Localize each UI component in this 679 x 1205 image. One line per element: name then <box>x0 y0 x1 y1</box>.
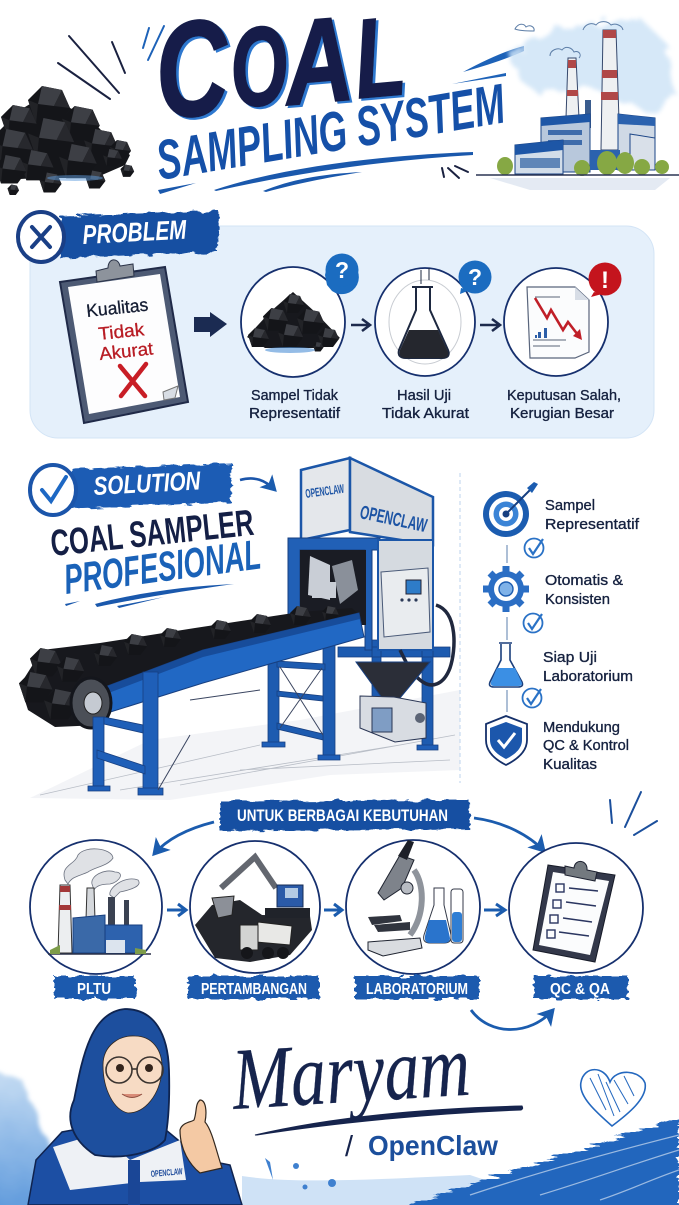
discharge funnel <box>356 662 430 698</box>
section: solution heading <box>30 463 275 608</box>
step labels <box>249 387 621 422</box>
question bubble <box>325 260 359 294</box>
question bubble <box>458 260 492 294</box>
text: sampel representatif: Representatif <box>545 516 640 533</box>
step 2: flask <box>375 260 492 376</box>
icon: coal pile <box>0 86 134 195</box>
brand: OpenClaw: / <box>345 1131 354 1163</box>
eyes and mouth <box>116 1064 153 1098</box>
heading: COAL: O <box>226 2 292 131</box>
face <box>103 1036 162 1113</box>
back legs <box>268 640 450 757</box>
step labels: Kerugian Besar <box>510 405 614 422</box>
person: mascot <box>28 1009 242 1205</box>
text: siap uji laboratorium <box>543 649 633 685</box>
step labels: Tidak Akurat <box>382 405 470 422</box>
icon: check <box>524 614 542 632</box>
step 1: coal sample: ? <box>335 257 349 283</box>
arrow <box>167 904 186 916</box>
upper hopper box <box>301 458 433 545</box>
step 3: falling report: ! <box>601 267 609 294</box>
circle: mining <box>190 841 320 973</box>
trees <box>497 151 669 176</box>
arrow right <box>474 818 544 851</box>
red cross <box>120 364 146 396</box>
text: mendukung qc <box>543 719 629 773</box>
title: COAL SAMPLING SYSTEM <box>150 0 510 194</box>
white chest panel <box>53 1133 186 1190</box>
crusher mechanism <box>300 550 366 625</box>
icon: check <box>522 688 542 708</box>
clipboard <box>60 260 188 423</box>
clipboard: Tidak <box>97 319 146 344</box>
illustration: power plant <box>476 18 679 190</box>
circle: laboratory <box>346 840 480 974</box>
buildings <box>541 114 590 172</box>
text: mendukung qc: Kualitas <box>543 756 597 773</box>
circle: pltu <box>30 840 162 974</box>
sample box <box>360 696 426 742</box>
heading: COAL <box>150 0 410 147</box>
alert bubble <box>588 262 622 296</box>
footer wash: light band <box>242 1175 560 1205</box>
title underline strokes <box>158 152 473 194</box>
step 2: flask: ? <box>468 264 482 290</box>
text: siap uji laboratorium: Laboratorium <box>543 668 633 685</box>
text: otomatis konsisten <box>545 572 623 608</box>
arrow <box>351 319 370 331</box>
panel: problem <box>18 211 654 438</box>
chimneys <box>601 30 620 150</box>
cable <box>400 605 454 685</box>
pill labels <box>54 976 628 999</box>
arrow to machine <box>240 478 275 490</box>
banner: UNTUK BERBAGAI KEBUTUHAN <box>237 806 448 825</box>
solution banner <box>30 463 232 515</box>
problem banner: PROBLEM <box>82 215 188 250</box>
ground <box>476 174 679 176</box>
clouds <box>515 22 623 58</box>
benefits list <box>483 482 640 773</box>
pill labels: LABORATORIUM <box>366 981 468 998</box>
clipboard text: Kualitas <box>85 295 149 321</box>
icon: target <box>483 482 538 537</box>
jacket <box>28 1125 242 1205</box>
heading: coal sampler: COAL SAMPLER <box>49 502 256 564</box>
solution banner: SOLUTION <box>93 465 202 501</box>
decorative burst lines <box>58 26 468 178</box>
step labels: Sampel Tidak <box>251 387 338 404</box>
pill labels: PLTU <box>77 981 111 998</box>
divider <box>459 473 461 783</box>
icon: shield <box>486 716 527 765</box>
step labels: Representatif <box>249 405 341 422</box>
arrow <box>194 312 227 337</box>
section: untuk berbagai kebutuhan <box>30 792 657 1030</box>
coal on belt <box>19 606 360 727</box>
footer wash: left <box>0 1072 62 1205</box>
problem banner <box>18 211 219 262</box>
arrow <box>484 904 505 916</box>
underline strokes <box>65 584 234 608</box>
pill labels: QC & QA <box>550 981 610 998</box>
step 1: coal sample <box>241 254 359 377</box>
illustration: coal sampler machine <box>19 458 460 800</box>
text: mendukung qc: QC & Kontrol <box>543 737 629 754</box>
curved arrow <box>471 1010 553 1030</box>
brand: OpenClaw: OpenClaw <box>368 1130 498 1161</box>
connector lines <box>506 545 508 712</box>
floor sketch <box>30 690 460 800</box>
text: mendukung qc: Mendukung <box>543 719 620 736</box>
text: sampel representatif <box>545 497 640 533</box>
label: small OPENCLAW: OPENCLAW <box>304 482 345 501</box>
jacket logo: OPENCLAW <box>150 1166 183 1179</box>
icon: gear <box>483 566 529 612</box>
sparks <box>610 792 657 835</box>
tail drum <box>71 678 111 728</box>
label: large OPENCLAW: OPENCLAW <box>358 502 429 537</box>
icon: flask <box>490 643 522 687</box>
conveyor side beam <box>97 613 364 714</box>
thumbs-up hand <box>180 1100 222 1173</box>
signature underline <box>255 1106 523 1135</box>
signature: Maryam: Maryam <box>228 1018 473 1129</box>
text: siap uji laboratorium: Siap Uji <box>543 649 597 666</box>
splash dots <box>265 1158 336 1190</box>
front legs <box>88 672 438 795</box>
icon: check <box>524 538 544 558</box>
arrow left <box>154 822 214 854</box>
hijab <box>70 1009 169 1157</box>
text: otomatis konsisten: Konsisten <box>545 591 610 608</box>
lower frame <box>288 538 380 650</box>
panel background <box>30 226 654 438</box>
arrow <box>480 319 500 331</box>
circle: qc checklist <box>509 843 643 973</box>
footer brush wave <box>411 1118 679 1205</box>
glasses <box>106 1057 163 1083</box>
banner <box>220 800 470 831</box>
sky wash <box>512 18 672 112</box>
step labels: Hasil Uji <box>397 387 451 404</box>
step 3: falling report <box>504 262 622 376</box>
clipboard: Akurat <box>98 338 154 364</box>
pill labels: PERTAMBANGAN <box>201 981 307 998</box>
step labels: Keputusan Salah, <box>507 387 621 404</box>
text: otomatis konsisten: Otomatis & <box>545 572 623 589</box>
icon: heart <box>581 1070 645 1126</box>
heading: profesional: PROFESIONAL <box>61 530 263 603</box>
arrow <box>324 904 342 916</box>
blue speed flares <box>452 46 524 84</box>
text: sampel representatif: Sampel <box>545 497 595 514</box>
control cabinet <box>381 568 430 637</box>
